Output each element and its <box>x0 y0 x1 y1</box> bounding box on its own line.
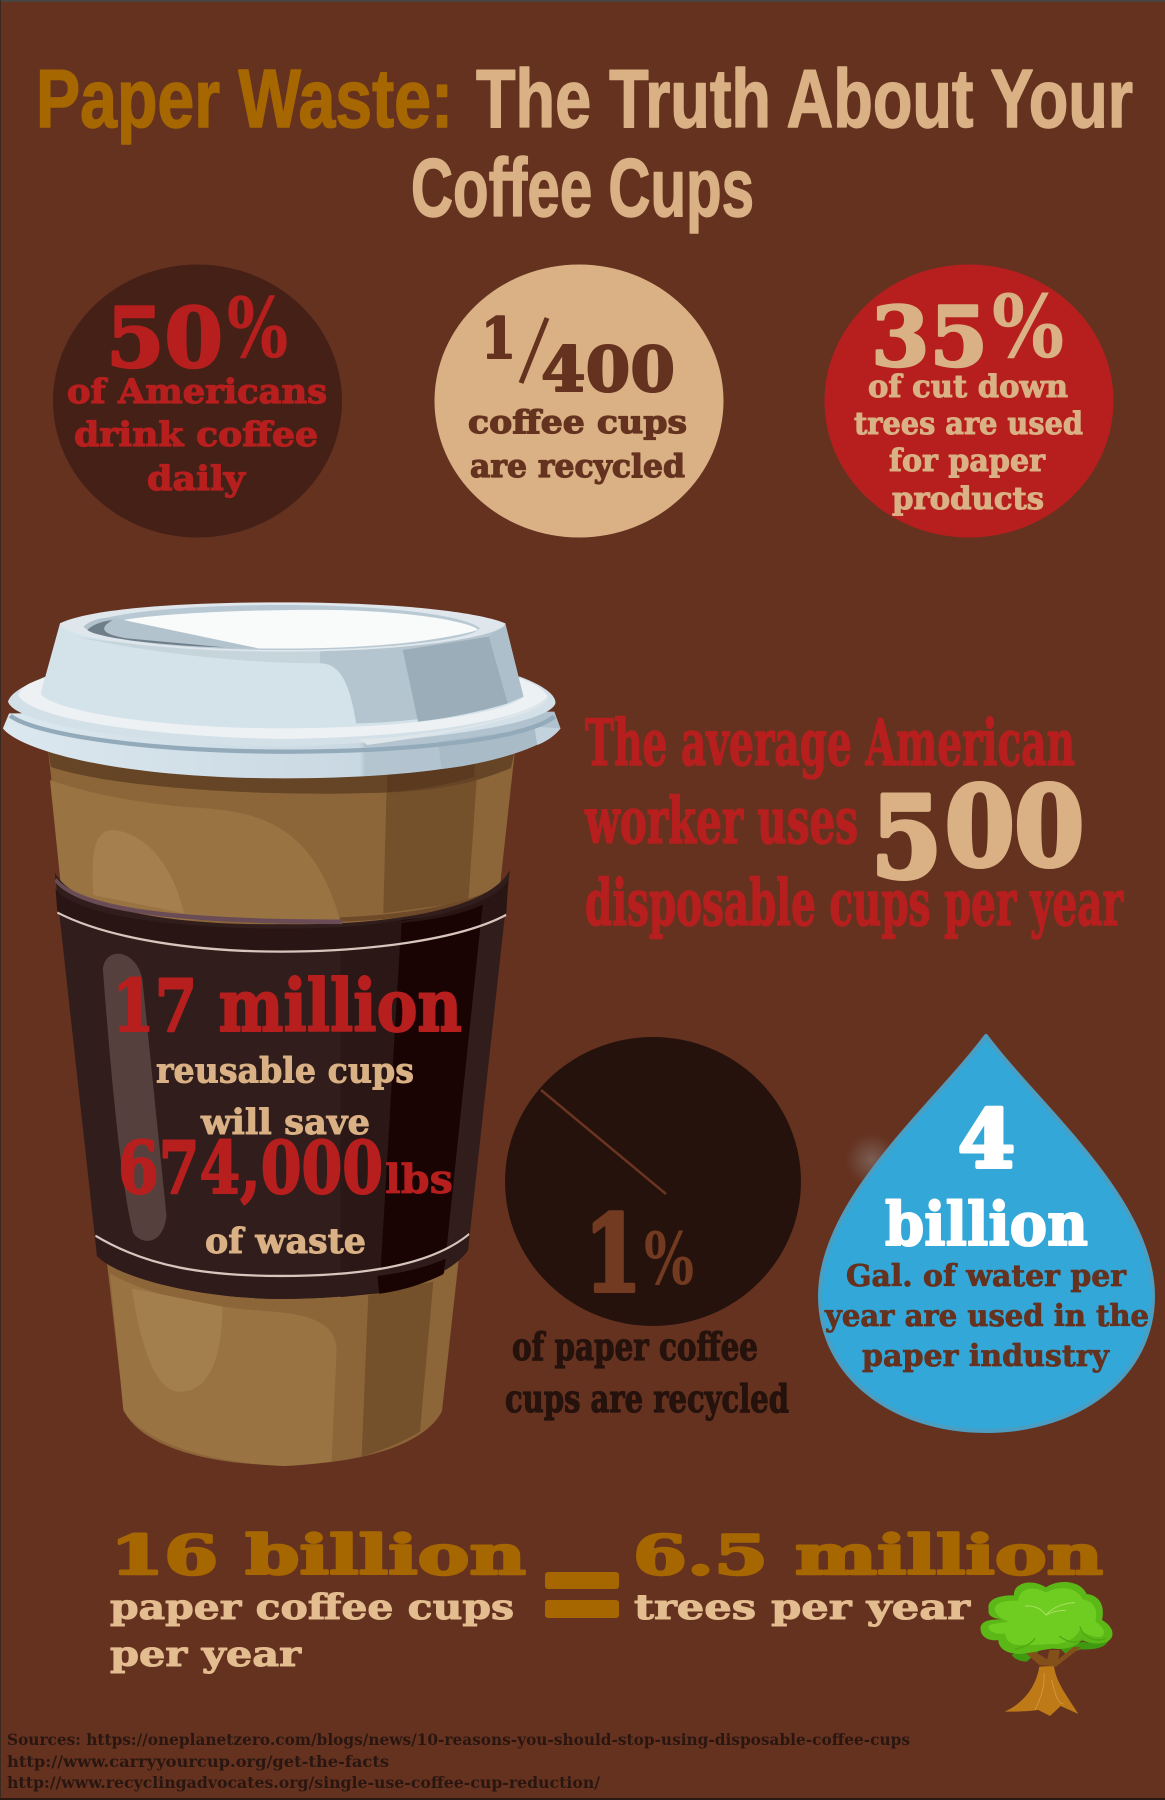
sleeve stat: 17 million reusable cups: will save <box>200 1102 370 1143</box>
sleeve stat: 17 million reusable cups: lbs <box>385 1156 453 1203</box>
panel: 35% of cut down trees: of cut down <box>868 369 1068 405</box>
panel: 1% recycled pie: of paper coffee <box>512 1324 758 1369</box>
panel: 35% of cut down trees: for paper <box>889 443 1046 479</box>
panel: 1/400 coffee cups: 1 <box>481 306 516 372</box>
equation: 16 billion cups equals 6.5 million trees: trees per year <box>634 1587 971 1628</box>
panel: 1% recycled pie: % <box>644 1216 694 1301</box>
panel: 35% of cut down trees: % <box>992 277 1064 378</box>
icon: tree <box>981 1582 1113 1716</box>
panel: water drop 4 billion gallons <box>820 1036 1153 1431</box>
panel: 35% of cut down trees: trees are used <box>854 406 1083 442</box>
panel: 35% of cut down trees: 35 <box>871 290 988 386</box>
cup lid <box>3 602 561 778</box>
panel: 1% recycled pie <box>505 1037 801 1421</box>
sources: http://www.recyclingadvocates.org/single-use-coffee-cup-reduction/ <box>7 1773 600 1792</box>
panel: 50% of Americans: of Americans <box>67 372 327 412</box>
panel: 1% recycled pie: cups are recycled <box>505 1376 789 1421</box>
callout: average American worker uses 500 cups: 5 <box>871 773 942 904</box>
panel: 50% of Americans: 50 <box>106 291 223 387</box>
callout: average American worker uses 500 cups <box>584 706 1124 941</box>
panel: 1% recycled pie: 1 <box>584 1191 642 1316</box>
panel: 1/400 coffee cups: are recycled <box>470 447 685 485</box>
panel: water drop 4 billion gallons: 4 <box>958 1092 1015 1186</box>
cup body <box>48 750 515 1466</box>
panel: water drop 4 billion gallons: billion <box>885 1190 1088 1260</box>
title: Paper Waste: <box>36 52 453 145</box>
callout: average American worker uses 500 cups: worker uses <box>584 784 858 859</box>
sources: http://www.carryyourcup.org/get-the-facts <box>7 1752 389 1771</box>
title <box>36 52 1133 234</box>
callout: average American worker uses 500 cups: 00 <box>945 762 1084 891</box>
coffee cup illustration <box>3 602 561 1466</box>
equation: 16 billion cups equals 6.5 million trees: paper coffee cups <box>110 1587 514 1628</box>
equation: 16 billion cups equals 6.5 million trees: 6.5 million <box>633 1523 1103 1587</box>
panel: 50% of Americans <box>53 264 342 538</box>
sleeve stat: 17 million reusable cups <box>112 963 462 1262</box>
sleeve stat: 17 million reusable cups: 674,000 <box>118 1125 383 1210</box>
panel: 50% of Americans: drink coffee <box>74 415 318 455</box>
equation: 16 billion cups equals 6.5 million trees: per year <box>110 1634 302 1675</box>
sleeve stat: 17 million reusable cups: reusable cups <box>156 1050 414 1092</box>
panel: water drop 4 billion gallons: year are used in the <box>824 1299 1149 1334</box>
sleeve stat: 17 million reusable cups: of waste <box>205 1221 366 1262</box>
panel: water drop 4 billion gallons: paper industry <box>862 1339 1111 1374</box>
panel: 1/400 coffee cups <box>434 264 724 538</box>
panel: 1/400 coffee cups: 400 <box>541 333 675 406</box>
cup sleeve <box>55 870 510 1299</box>
sources: Sources: https://oneplanetzero.com/blogs/news/10-reasons-you-should-stop-using-disposable-coffee-cups <box>7 1730 910 1749</box>
title: Coffee Cups <box>411 141 754 234</box>
equation: 16 billion cups equals 6.5 million trees: 16 billion <box>110 1523 526 1587</box>
panel: 50% of Americans: % <box>227 281 288 377</box>
panel: 1/400 coffee cups: coffee cups <box>468 403 687 441</box>
sources <box>7 1730 910 1792</box>
panel: 35% of cut down trees <box>824 264 1114 538</box>
panel: 35% of cut down trees: products <box>892 481 1044 517</box>
panel: 50% of Americans: daily <box>147 459 246 499</box>
panel: water drop 4 billion gallons: Gal. of water per <box>846 1259 1127 1294</box>
sleeve stat: 17 million reusable cups: 17 million <box>112 963 462 1048</box>
equation: 16 billion cups equals 6.5 million trees <box>110 1523 1103 1675</box>
